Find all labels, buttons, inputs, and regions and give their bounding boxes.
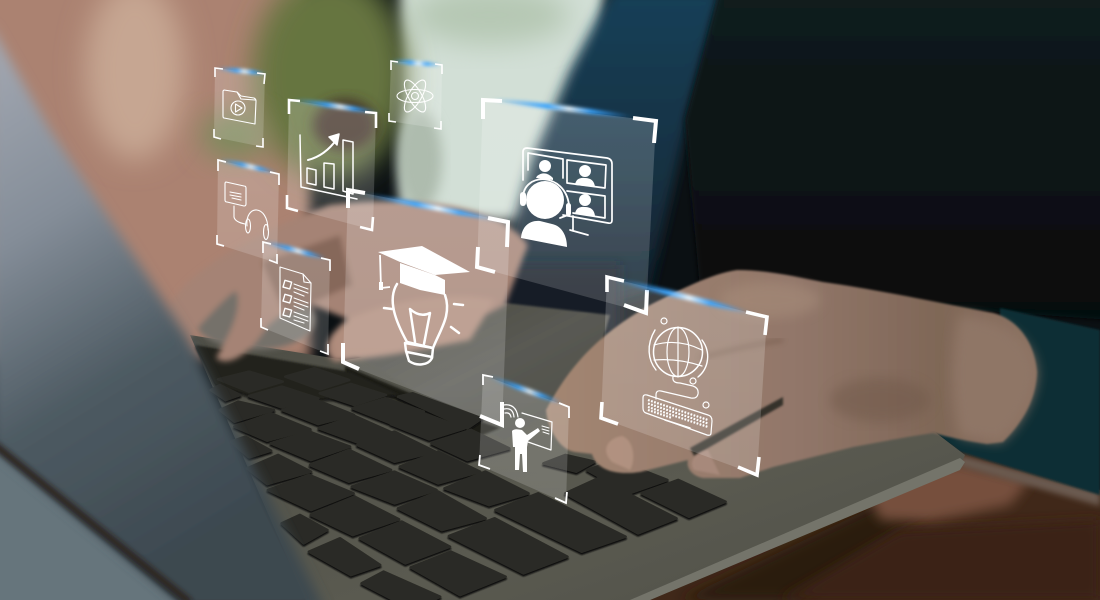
icon: screen and headphones [225,182,268,240]
icon: folder with play button [223,90,256,124]
glare: atom panel [390,59,442,67]
palm rest behind the keyboard [340,300,610,440]
brackets: teacher panel [479,375,569,503]
glare: video conference panel [490,97,634,119]
sweater sleeve [930,308,1100,495]
icon: agent with video call grid [520,148,612,247]
laptop base [190,328,965,600]
brackets: checklist panel [261,242,330,354]
brackets: headset panel [217,160,279,263]
keyboard [195,345,725,600]
glare: bulb panel [360,191,502,223]
brackets: atom panel [389,61,442,129]
panel: online teacher [479,374,569,503]
panel: global keyboard [601,276,767,475]
panel: video conference [477,97,656,313]
icon: teacher at a board [503,405,552,472]
icon: graduation cap on light bulb [378,246,470,364]
brackets: chart panel [287,100,376,230]
panel: graduation cap bulb [343,190,510,425]
icon: globe above keyboard [643,318,712,435]
brackets: bulb panel [343,190,508,425]
laptop screen in the foreground [0,25,325,600]
right hand [546,270,1037,478]
glare: folder panel [216,66,268,76]
glare: global keyboard panel [611,276,753,316]
glare: headset panel [218,157,278,175]
wooden table [640,440,1100,600]
glare: teacher panel [488,374,564,406]
panel: checklist document [261,239,330,354]
panel: atom [389,59,442,129]
glare: checklist panel [263,239,327,261]
panel: headset support [217,157,279,263]
icon: atom [397,77,433,115]
brackets: video conference panel [477,100,656,313]
glare: chart panel [292,97,380,115]
brackets: global keyboard panel [601,277,767,475]
icon: bar chart with arrow [300,134,357,199]
left hand, blurred [168,201,528,362]
panel: growth chart [287,97,380,230]
brackets: folder panel [214,68,265,147]
icon: checklist document [280,267,311,331]
panel: folder video [214,66,268,147]
